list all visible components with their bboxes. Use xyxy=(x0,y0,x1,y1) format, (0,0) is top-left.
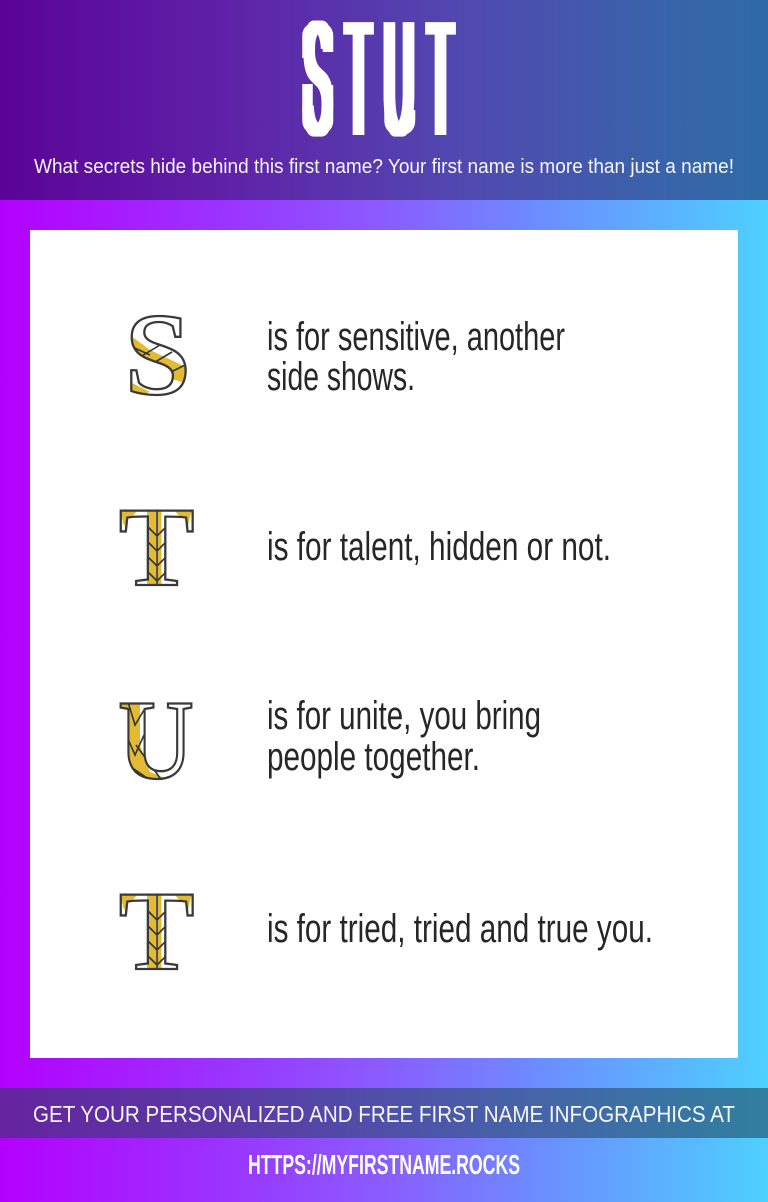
icon: letter T xyxy=(120,510,194,586)
header band xyxy=(0,0,768,200)
text: S line: is for sensitive, another xyxy=(267,315,565,359)
footer band xyxy=(0,1088,768,1138)
icon: letter T second: T xyxy=(119,869,194,994)
icon: letter S xyxy=(130,314,187,396)
footer url: HTTPS://MYFIRSTNAME.ROCKS xyxy=(248,1149,520,1180)
icon: letter U: U xyxy=(118,678,194,803)
subtitle: What secrets hide behind this first name? Your first name is more than just a name! xyxy=(34,156,734,178)
icon: letter T second xyxy=(120,894,194,970)
icon: letter U xyxy=(120,702,192,780)
icon: letter S: S xyxy=(125,289,191,420)
icon: letter T: T xyxy=(119,485,194,610)
text: S line: side shows. xyxy=(267,355,415,399)
text: U line: is for unite, you bring xyxy=(267,694,541,738)
text: T line: is for talent, hidden or not. xyxy=(267,525,611,569)
text: S line xyxy=(267,315,565,399)
text: U line: people together. xyxy=(267,735,480,779)
panel: letter meanings xyxy=(30,230,738,1058)
text: U line xyxy=(267,694,541,779)
